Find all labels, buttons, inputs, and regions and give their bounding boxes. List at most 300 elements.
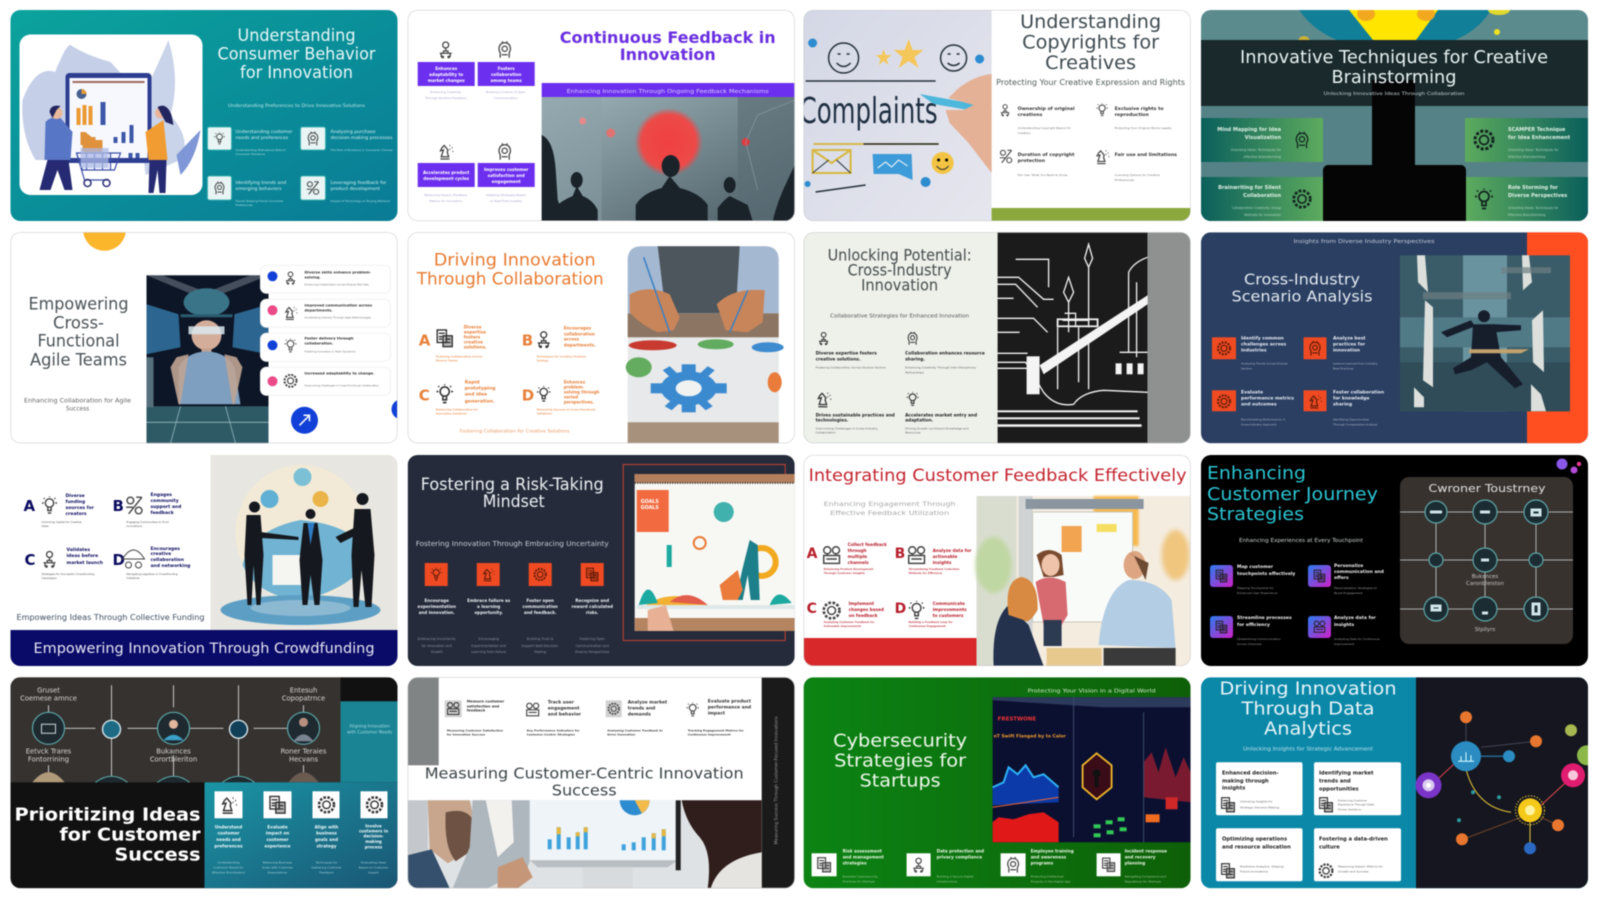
item: employee training: Employee training: [1031, 848, 1074, 853]
top tagline: Protecting Your Vision in a Digital World: [1028, 688, 1156, 694]
item: analyze: Improvement: [1334, 642, 1355, 646]
list row 2: Improved communication across: [304, 303, 373, 307]
box: operations: Predictive Analytics: Shaping: [1240, 864, 1284, 868]
item: duration: Fair Use: What You Need to Know: [1018, 173, 1068, 177]
item A: [419, 324, 487, 362]
item: involve customers: [359, 791, 389, 874]
item: knowledge sharing: for knowledge: [1333, 395, 1369, 401]
item B: [522, 325, 596, 362]
box: role storming: Effective Brainstorming: [1508, 213, 1545, 217]
title: [28, 294, 128, 370]
photo: woman at holographic table: [146, 275, 268, 443]
item: resource sharing: Enhancing Creativity Through Inter-Disciplinary: [905, 365, 976, 369]
item: risk assessment: Essential Cybersecurity: [843, 874, 878, 878]
item B: feedback: [150, 510, 175, 516]
item: exclusive rights: [1096, 103, 1172, 130]
item D: creative: [150, 551, 171, 557]
box: decision-making: making through: [1222, 778, 1269, 784]
item: performance metrics: Benchmarking Performance: A: [1241, 417, 1285, 421]
item D: Navigating Legalities in Crowdfunding: [126, 572, 178, 576]
item A: Unlocking Capital for Creative: [42, 520, 82, 524]
title bar: Empowering Innovation Through Crowdfunding: [34, 641, 374, 657]
item: duration: Duration of copyright: [1018, 152, 1075, 158]
item: market trends: demands: [628, 711, 651, 717]
item: map touchpoints: touchpoints effectively: [1237, 571, 1295, 577]
item: product performance: Evaluate product: [708, 698, 752, 704]
item: adaptability: Enhancing Creativity: [430, 90, 462, 94]
cart: [76, 153, 120, 180]
item B: Engages: [150, 492, 172, 498]
item: market trends: [606, 699, 668, 736]
item: streamline: Streamlining Communication: [1237, 637, 1281, 641]
item: product performance: Tracking Engagement Metrics for: [688, 728, 744, 732]
box: data-driven culture: Measuring Impact: Metrics for: [1338, 864, 1384, 868]
title: Strategies for: [834, 751, 967, 771]
network art panel: [1416, 677, 1597, 888]
item: personalize: communication and: [1334, 569, 1384, 575]
item A: multiple: [848, 554, 867, 559]
item A: Enhancing Product Development: [824, 567, 874, 571]
item: improves: Adapting Strategies Based: [486, 193, 526, 197]
item: exclusive rights: Exclusive rights to: [1115, 106, 1164, 112]
item: purchase decisions: The Role of Emotions in Consumer Choices: [330, 148, 393, 152]
item: employee training: programs: [1031, 860, 1054, 865]
item: duration: protection: [1018, 158, 1045, 164]
item: performance metrics: performance metrics: [1241, 395, 1294, 401]
list row 3: Fostering Innovation in Team Dynamics: [304, 349, 356, 353]
title: Cross-: [53, 313, 104, 333]
item A: [807, 542, 887, 575]
item: involve customers: Evaluating Ideas: [361, 860, 386, 864]
item: align goals: [311, 791, 343, 874]
subtitle: Collaborative Strategies for Enhanced Innovation: [830, 313, 970, 319]
item: measure satisfaction: feedback: [467, 708, 486, 712]
item: track engagement: [527, 699, 582, 736]
photo: watercolor team at board: [976, 496, 1191, 666]
box: scamper: [1465, 118, 1588, 162]
title: [1207, 464, 1378, 525]
item: customer needs: [208, 127, 293, 156]
item: accelerates: Accelerates product: [423, 170, 469, 175]
item: ownership: Creators: [1018, 131, 1031, 135]
item B: departments.: [564, 342, 596, 347]
item A: Fostering Collaboration Across: [436, 354, 483, 358]
item: ownership: [1001, 105, 1075, 135]
item: trends: [208, 176, 286, 207]
subtitle band: Enhancing Innovation Through Ongoing Feedback Mechanisms: [567, 89, 769, 95]
title: for Innovation: [240, 63, 353, 82]
item: sustainable practices: Overcoming Challenges in Cross-Industry: [816, 426, 878, 430]
item D: Continuous Engagement: [909, 624, 946, 628]
item: involve customers: Based on Customer: [359, 865, 389, 869]
title: for Customer: [60, 824, 201, 845]
box: role storming: [1466, 177, 1588, 221]
list row 4: Increased adaptability to change.: [304, 371, 375, 375]
photo: hands sketching gears: [626, 246, 784, 443]
item: purchase decisions: decision-making processes: [330, 135, 393, 141]
item D: problem-: [564, 384, 584, 389]
item: open communication: and feedback.: [524, 610, 557, 615]
item: experimentation: experimentation: [418, 604, 456, 609]
panel: journey map: Stpllyrs: [1475, 627, 1495, 633]
item: reward risks: Fostering Open: [580, 637, 605, 641]
item: open communication: Foster open: [526, 598, 554, 603]
item: track engagement: Key Performance Indicators for: [527, 728, 580, 732]
item: resource sharing: [905, 332, 985, 374]
item: streamline: Across Channels: [1237, 642, 1262, 646]
item: data protection: [907, 848, 984, 883]
item: best practices: Analyze best: [1333, 335, 1366, 341]
item: personalize: Boost Engagement: [1334, 591, 1363, 595]
card: understanding consumer behavior: [10, 10, 398, 221]
item C: ideas before: [66, 553, 98, 559]
item A: funding: [66, 499, 85, 505]
item: best practices: [1304, 335, 1378, 370]
title: Innovation: [861, 275, 938, 294]
item D: [112, 546, 190, 580]
title: Driving Innovation: [1220, 679, 1396, 699]
photo: node network on dark wall: Gruset: [37, 686, 60, 694]
item: common challenges: industries: [1241, 347, 1267, 353]
item: customer needs: Understanding Motivations Behind: [236, 148, 286, 152]
list row 1: solving.: [304, 275, 321, 279]
item: sustainable practices: Drives sustainable practices and: [816, 412, 895, 418]
subtitle: [824, 500, 956, 517]
side bar with vertical text: [762, 677, 795, 888]
item: align goals: business: [316, 830, 337, 835]
item: best practices: Lessons Learned from Industry: [1333, 361, 1378, 365]
item: adaptability: [418, 42, 475, 100]
item: understand needs: Customer Needs for: [213, 865, 244, 869]
item: streamline: [1210, 615, 1292, 646]
item: incident response: [1097, 848, 1167, 883]
item D: improvements: [933, 607, 967, 612]
item: collaboration: Fosters: [498, 66, 515, 71]
item: open communication: communication: [523, 604, 558, 609]
item: purchase decisions: [300, 127, 393, 152]
photo: node network on dark wall: Roner Teraies: [281, 747, 327, 755]
item: market trends: Drive Innovation: [607, 732, 635, 736]
item D: [522, 379, 599, 415]
box: mind mapping: Unlocking Ideas: Techniques for: [1231, 148, 1282, 152]
item: knowledge sharing: Through Comparative Analysis: [1332, 422, 1378, 426]
item: embrace failure: a learning: [477, 604, 500, 609]
item D: Building a Feedback Loop for: [909, 620, 953, 624]
item C: Enhancing Collaboration for: [436, 407, 479, 411]
card: cybersecurity strategies: [804, 677, 1191, 888]
item: data protection: Infrastructure: [937, 879, 957, 883]
item: product performance: [687, 698, 752, 736]
item: align goals: Techniques for: [315, 860, 338, 864]
title: Success: [552, 781, 617, 799]
title: [218, 26, 376, 82]
item: track engagement: Track user: [548, 699, 575, 705]
subtitle: Enhancing Engagement Through: [824, 500, 956, 508]
item D: perspectives.: [564, 399, 595, 404]
subtitle: Understanding Preferences to Drive Innovative Solutions: [228, 103, 366, 109]
item: diverse expertise: Fostering Collaboration Across Diverse Sectors: [816, 365, 886, 369]
photo: complaints board: [800, 10, 992, 221]
item: map touchpoints: Map customer: [1237, 564, 1274, 570]
photo: leaping businessman: [1400, 255, 1570, 411]
item: accelerates: development cycles: [423, 176, 470, 181]
item: track engagement: Customer-Centric Strategies: [527, 732, 575, 736]
item: market trends: trends and: [628, 705, 655, 711]
art: abstract skyline: [998, 232, 1191, 443]
accent block: [408, 677, 439, 765]
box: decision-making: insights: [1222, 785, 1245, 791]
title: Measuring Customer-Centric Innovation: [425, 764, 744, 782]
title: Understanding: [238, 26, 356, 45]
man right: [1124, 551, 1146, 579]
box: market trends: [1314, 762, 1401, 815]
item C: C: [24, 551, 36, 569]
item A: through: [848, 548, 867, 553]
item A: channels: [848, 560, 869, 565]
item: streamline: Streamline processes: [1237, 615, 1292, 621]
item A: [24, 493, 95, 528]
list row 4: Overcoming Challenges in Cross-Functional Collaboration: [304, 383, 379, 387]
item: diverse expertise: [816, 332, 886, 369]
item: reward risks: [571, 563, 613, 654]
item: market entry: Resources: [905, 430, 921, 434]
item: risk assessment: [812, 848, 884, 883]
list row 1: [260, 265, 390, 293]
photo: team reviewing dashboard: [408, 800, 762, 888]
item B: insights: [933, 560, 952, 565]
title: Cross-Industry: [848, 260, 952, 279]
item B: Innovations: [126, 524, 143, 528]
box: role storming: Unlocking Ideas: Techniques for: [1508, 206, 1559, 210]
item A: creative: [464, 339, 483, 344]
title: Integrating Customer Feedback Effectively: [809, 466, 1187, 486]
item B: B: [112, 497, 124, 515]
item: resource sharing: sharing.: [905, 356, 925, 362]
title: Success: [114, 844, 200, 865]
item: personalize: Personalize: [1334, 563, 1363, 569]
item B: Streamlining Feedback Collection: [909, 567, 960, 571]
illustration: shoppers with tablet chart: [20, 34, 202, 195]
list row 1: Enhancing Collaboration Across Diverse Skill Sets: [304, 282, 369, 286]
item D: Encourages: [150, 546, 180, 552]
bottom bar: [992, 208, 1191, 221]
item: analyze: insights: [1334, 622, 1355, 628]
box: operations: Future Innovations: [1240, 869, 1268, 873]
item: best practices: practices for: [1333, 341, 1366, 347]
photo: security dashboard: nT Swift Flanged by to Calor: [994, 733, 1066, 739]
box: market trends: Enhancing Customer: [1338, 798, 1368, 802]
item B: actionable: [933, 554, 957, 559]
title: [560, 30, 776, 61]
item: evaluate impact: experience: [264, 843, 291, 848]
item: experimentation: and innovation.: [419, 610, 455, 615]
item C: [419, 379, 495, 415]
item: measure satisfaction: Measuring Customer Satisfaction: [447, 728, 503, 732]
item: align goals: Feedback: [319, 870, 334, 874]
item: personalize: offers: [1334, 575, 1349, 581]
item: embrace failure: Learning from Failure: [471, 650, 506, 654]
item: open communication: Building Trust to: [527, 637, 554, 641]
title: Driving Innovation: [434, 250, 596, 270]
item: performance metrics: Evaluate: [1241, 389, 1263, 395]
subtitle: Unlocking Insights for Strategic Advancement: [1243, 746, 1374, 752]
item: improves: on Real-Time Insights: [490, 199, 522, 203]
list row 3: Faster delivery through: [304, 336, 354, 340]
box: role storming: Role Storming for: [1508, 185, 1558, 191]
title bar: [10, 630, 398, 666]
item: employee training: [1001, 848, 1074, 883]
title: Continuous Feedback in: [560, 28, 776, 47]
item: risk assessment: and management: [843, 854, 884, 859]
title: [1232, 270, 1372, 305]
footer tagline: Fostering Collaboration for Creative Solutions: [460, 428, 570, 434]
item D: D: [522, 386, 534, 404]
accent half circle: [83, 208, 126, 251]
item: align goals: Gathering Customer: [311, 865, 343, 869]
item: common challenges: Identify common: [1241, 335, 1284, 341]
item: measure satisfaction: for Innovation Success: [447, 732, 485, 736]
item C: changes based: [849, 607, 884, 612]
title: Brainstorming: [1332, 68, 1456, 88]
woman: [146, 120, 168, 160]
title: [833, 731, 967, 791]
item: align goals: Align with: [315, 824, 338, 829]
box: scamper: SCAMPER Technique: [1508, 127, 1566, 133]
item: involve customers: customers in: [359, 828, 388, 833]
item: reward risks: risks.: [586, 610, 599, 615]
box: market trends: trends and: [1319, 778, 1351, 784]
item: diverse expertise: Diverse expertise fosters: [816, 350, 877, 356]
box: brainwriting: Brainwriting for Silent: [1218, 185, 1282, 191]
box: scamper: Unlocking Ideas: Techniques for: [1508, 148, 1559, 152]
title: Prioritizing Ideas: [14, 804, 200, 825]
box: data-driven culture: [1314, 828, 1401, 881]
subtitle: Effective Feedback Utilization: [830, 509, 949, 517]
list row 2: Accelerating Delivery Through Agile Methodologies: [304, 315, 372, 319]
item: knowledge sharing: Identifying Opportunities: [1333, 417, 1370, 421]
item C: Innovative Solutions: [436, 411, 467, 415]
item B: Encourages: [564, 325, 592, 330]
item A: Through Customer Insights: [824, 571, 865, 575]
item: reward risks: Diverse Perspectives: [575, 650, 610, 654]
item A: Ideas: [42, 524, 49, 528]
item: market entry: Accelerates market entry and: [905, 412, 977, 418]
title: [416, 250, 604, 289]
item: common challenges: [1212, 335, 1288, 370]
photo: security dashboard: FRESTWONE: [998, 716, 1036, 722]
item: track engagement: and behavior: [548, 711, 582, 717]
item: common challenges: Analyzing Trends Across Diverse: [1241, 361, 1288, 365]
item: experimentation: [418, 563, 456, 654]
item B: B: [895, 546, 905, 562]
item: performance metrics: and outcomes: [1241, 401, 1277, 407]
item: fair use: Fair use and limitations: [1115, 152, 1177, 158]
box: decision-making: Unlocking Insights for: [1240, 799, 1273, 803]
item: involve customers: Impact: [368, 870, 380, 874]
box: decision-making: Enhanced decision-: [1222, 770, 1279, 776]
item B: [112, 492, 181, 528]
item: experimentation: Embracing Uncertainty: [418, 637, 456, 641]
item: leveraging feedback: Impact of Technology on Buying Behavior: [330, 199, 391, 203]
item: data protection: Building a Secure Digital: [937, 874, 974, 878]
item: product performance: Continuous Improvement: [688, 732, 731, 736]
decorative bubbles: [1556, 458, 1581, 474]
item: measure satisfaction: [445, 699, 504, 736]
item D: D: [112, 551, 125, 569]
item C: [24, 547, 103, 580]
panel: journey map: Caronbleiston: [1466, 581, 1505, 587]
subtitle: Fostering Innovation Through Embracing Uncertainty: [416, 540, 609, 548]
item: embrace failure: Encouraging: [478, 637, 499, 641]
item: improves: Improves customer: [484, 167, 528, 172]
card: prioritizing ideas: [10, 677, 398, 888]
item C: prototyping: [465, 385, 495, 391]
item: sustainable practices: [816, 393, 895, 434]
card: understanding copyrights: [800, 10, 1191, 221]
orange side band: [1527, 232, 1588, 443]
tagline: Empowering Ideas Through Collective Funding: [16, 613, 204, 622]
item: embrace failure: opportunity.: [474, 610, 503, 615]
item: incident response: Regulations for Startups: [1125, 879, 1161, 883]
card: risk-taking mindset: [408, 455, 795, 666]
box: mind mapping: Visualization: [1245, 135, 1281, 141]
item: track engagement: engagement: [548, 705, 580, 711]
item: embrace failure: [467, 563, 511, 654]
notebook illustration: [635, 474, 795, 631]
box: brainwriting: Collaboration: [1243, 193, 1281, 199]
list row 3: [260, 333, 390, 361]
box: brainwriting: Collaborative Creativity: Group: [1232, 206, 1281, 210]
item: analyze: Analyzing Data for Continuous: [1334, 637, 1380, 641]
item: map touchpoints: Mapping Touchpoints for: [1237, 586, 1274, 590]
photo: node network on dark wall: Hecvans: [289, 755, 318, 763]
title: Through Collaboration: [416, 269, 604, 289]
item D: Enhances: [564, 379, 586, 384]
item B: community: [150, 498, 179, 504]
title: Customer Journey: [1207, 485, 1378, 505]
title: Strategies: [1207, 505, 1304, 525]
side panel: [340, 677, 398, 782]
item: performance metrics: [1212, 389, 1294, 426]
photo: node network on dark wall: Fontorrining: [28, 755, 69, 763]
item: understand needs: Understanding: [217, 860, 240, 864]
photo: node network on dark wall: Corortbleriton: [150, 755, 197, 763]
notebook illustration: GOALS: [641, 505, 659, 511]
item A: A: [24, 497, 36, 515]
subtitle: Unlocking Innovative Ideas Through Collaboration: [1324, 91, 1465, 97]
item: experimentation: Growth: [431, 650, 443, 654]
item: incident response: planning: [1125, 860, 1145, 865]
item: improves: satisfaction and: [488, 173, 525, 178]
item A: Diverse: [66, 493, 85, 499]
item D: and networking: [150, 563, 190, 569]
title: [1240, 48, 1548, 88]
title: [828, 245, 972, 294]
item A: Collect feedback: [848, 542, 887, 547]
title: Copyrights for: [1022, 32, 1159, 54]
title: Innovative Techniques for Creative: [1240, 48, 1548, 68]
item: measure satisfaction: Measure customer: [467, 699, 504, 703]
item B: Solving: [537, 358, 548, 362]
woman back left: [993, 605, 1044, 666]
item: involve customers: Involve: [365, 823, 382, 828]
item C: Strategies for Successful Crowdfunding: [42, 572, 95, 576]
photo: node network on dark wall: Coemese amnce: [20, 694, 77, 702]
item: experimentation: Encourage: [425, 598, 449, 603]
item: analyze: [1308, 615, 1380, 646]
photo: node network on dark wall: Eetvck Trares: [26, 747, 72, 755]
top tagline: Insights from Diverse Industry Perspectives: [1294, 239, 1435, 245]
